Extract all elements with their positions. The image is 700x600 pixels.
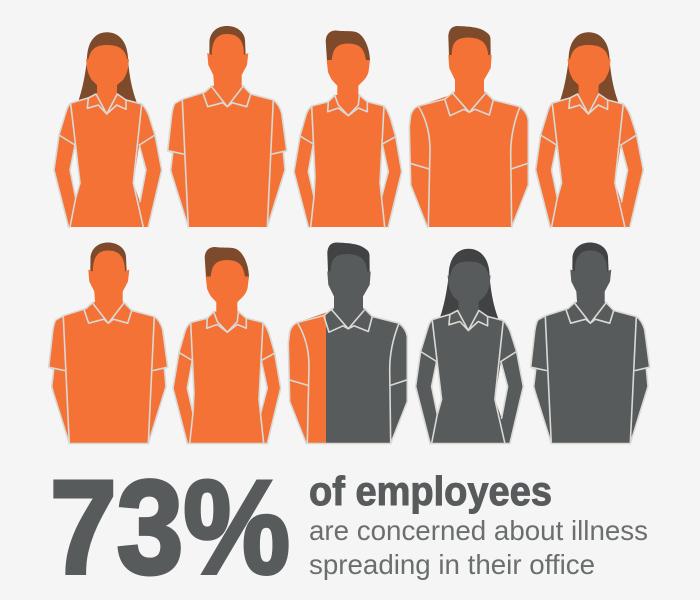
- person 3: man, orange: [294, 30, 402, 227]
- person 7: man, orange: [173, 247, 281, 444]
- person 1: woman, orange: [54, 32, 162, 227]
- statistic description line 2: spreading in their office: [309, 549, 595, 580]
- person 10: man, grey: [531, 242, 650, 444]
- person 9: woman, grey: [416, 249, 523, 444]
- person 8: man, partly orange, partly grey: [288, 242, 407, 444]
- person 2: man, orange: [168, 26, 287, 227]
- big statistic: 73%: [50, 454, 290, 600]
- statistic description line 1: are concerned about illness: [309, 515, 648, 546]
- person 5: woman, orange: [536, 32, 643, 227]
- statistic heading: of employees: [309, 468, 552, 514]
- person 6: man, orange: [49, 242, 168, 444]
- person 4: man, orange: [409, 26, 528, 227]
